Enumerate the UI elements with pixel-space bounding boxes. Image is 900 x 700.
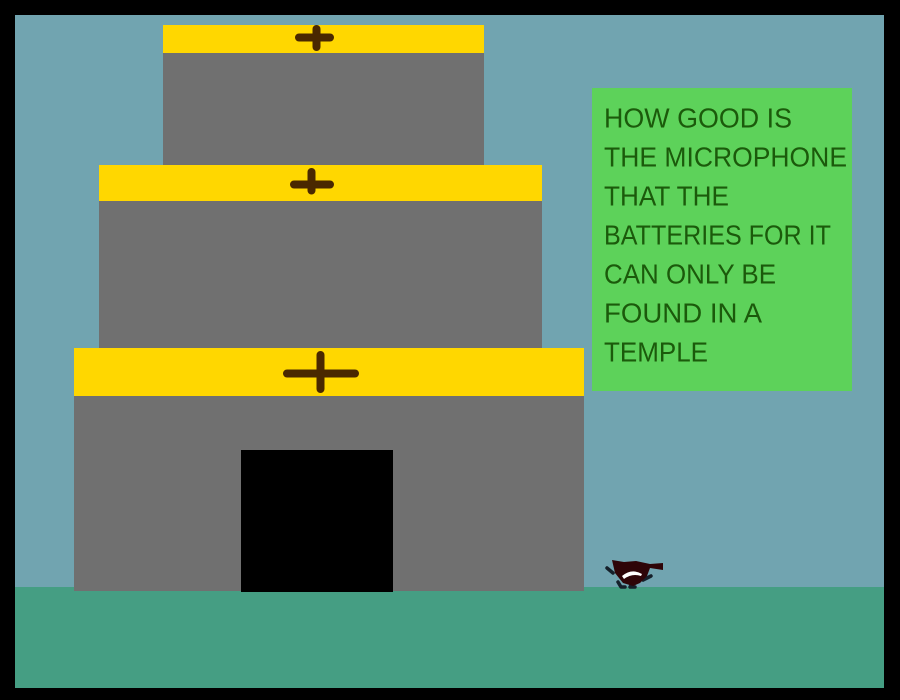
ground [15, 587, 884, 688]
character limbs [607, 568, 651, 587]
callout: green text box: BATTERIES FOR IT [604, 220, 831, 250]
temple bottom tier [74, 348, 584, 592]
temple top tier [163, 25, 484, 165]
sky background [15, 15, 884, 587]
callout: green text box [592, 88, 852, 391]
callout: green text box: THE MICROPHONE [604, 142, 847, 172]
callout: green text box: TEMPLE [604, 336, 708, 368]
callout: green text box: FOUND IN A [604, 298, 763, 328]
temple doorway [241, 450, 393, 592]
callout: green text box: CAN ONLY BE [604, 258, 776, 290]
temple [74, 25, 584, 592]
icon: running microphone character [607, 560, 663, 587]
character body [612, 560, 663, 586]
callout: green text box: THAT THE [604, 180, 729, 212]
temple middle tier [99, 165, 542, 349]
character mouth [622, 571, 642, 579]
callout: green text box: HOW GOOD IS [604, 102, 792, 134]
